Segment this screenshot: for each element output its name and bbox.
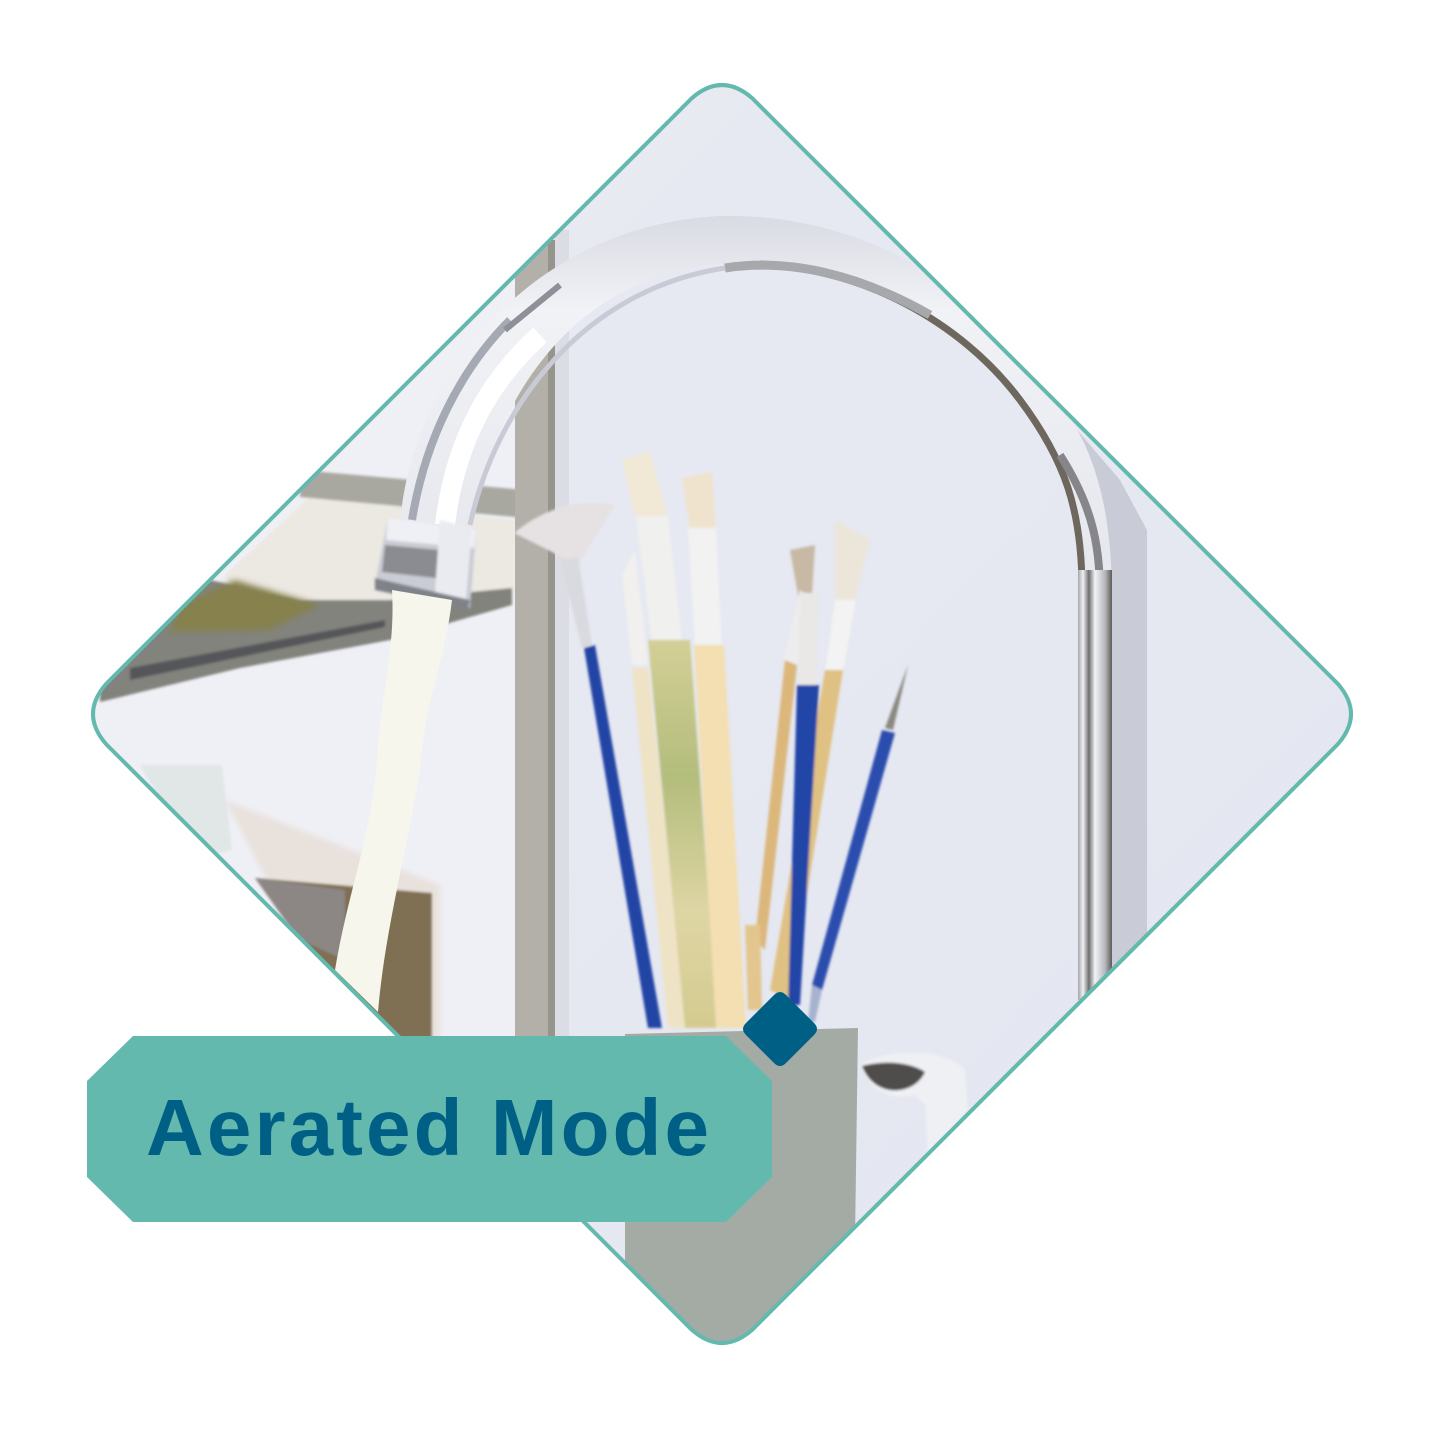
left wall bbox=[222, 594, 515, 1036]
diamond frame outline bbox=[93, 85, 1351, 1343]
shelf panel and frame objects bbox=[100, 470, 525, 1040]
infographic canvas bbox=[87, 82, 1354, 1346]
photo panel: faucet and brushes in diamond frame bbox=[80, 70, 1370, 1360]
aerator bbox=[375, 518, 476, 610]
faucet shadow on wall bbox=[1078, 430, 1147, 967]
water stream bbox=[335, 590, 452, 1012]
wall background bbox=[553, 87, 1349, 1260]
heading: Aerated Mode bbox=[146, 1083, 709, 1172]
blue brush right bbox=[808, 665, 908, 1022]
paint stained brush bbox=[622, 452, 718, 1028]
paint brushes bbox=[514, 452, 908, 1028]
faucet spout bbox=[400, 216, 1112, 1000]
long wooden brush bbox=[682, 472, 746, 1028]
pale brush rear bbox=[622, 550, 688, 1028]
tap handle bbox=[861, 1054, 966, 1150]
rear wooden brushes bbox=[745, 520, 870, 1010]
vertical pole bbox=[515, 230, 569, 1040]
blue brush centre bbox=[788, 592, 819, 1005]
fan brush bbox=[514, 503, 662, 1028]
cup bbox=[625, 1028, 858, 1345]
accent diamond bbox=[743, 992, 817, 1066]
label banner: Aerated Mode bbox=[87, 1036, 772, 1222]
